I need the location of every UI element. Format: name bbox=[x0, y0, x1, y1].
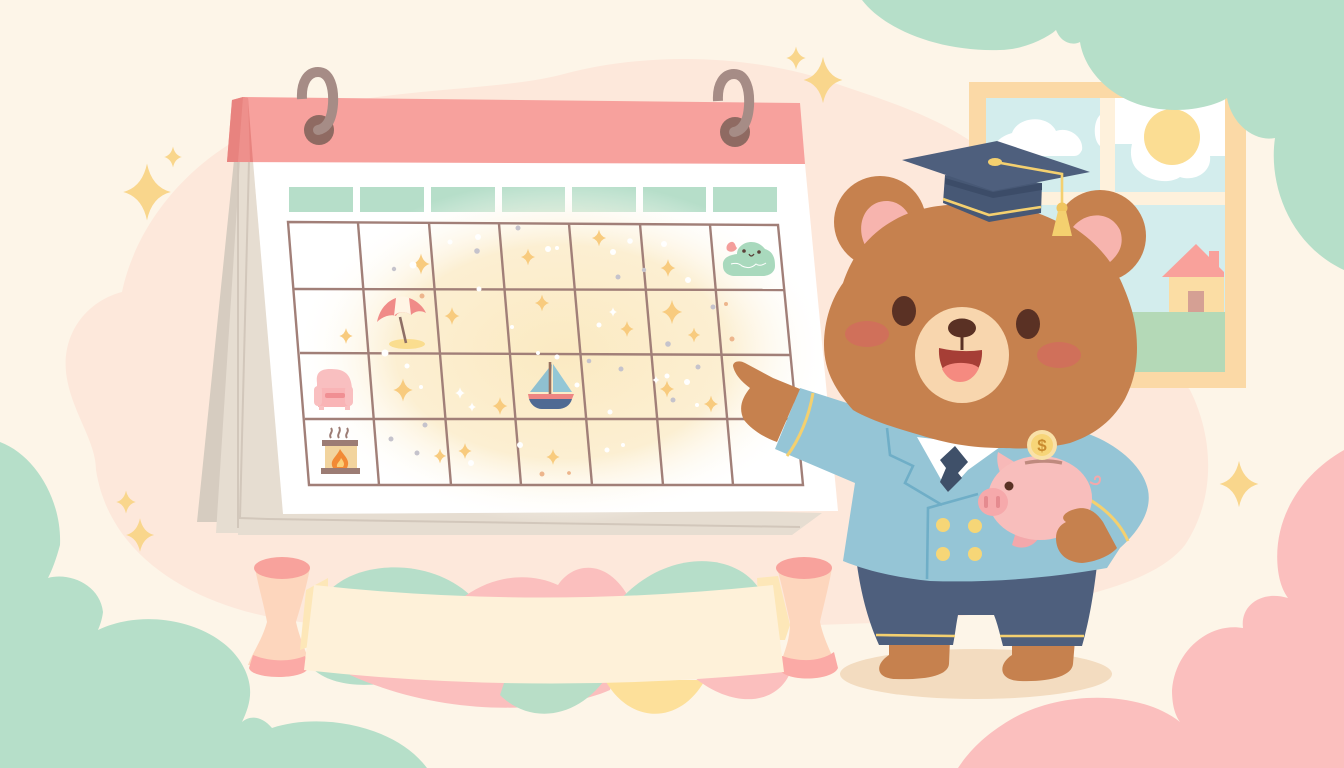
icon: beach umbrella bbox=[377, 296, 426, 349]
graduation cap bbox=[902, 141, 1090, 236]
icon: armchair bbox=[314, 369, 353, 410]
bear ground shadow bbox=[840, 649, 1112, 699]
bear holding paw bbox=[1056, 508, 1117, 563]
bear jacket bbox=[775, 388, 1149, 581]
orange dots on calendar bbox=[420, 294, 734, 476]
banner left scroll bbox=[248, 557, 328, 677]
coin: $ bbox=[1037, 436, 1047, 455]
window sun bbox=[1115, 98, 1225, 181]
blank banner ribbon bbox=[304, 585, 784, 684]
bear head bbox=[824, 204, 1137, 448]
jacket gold buttons bbox=[936, 518, 982, 561]
calendar top band bbox=[227, 97, 805, 164]
bear shorts bbox=[857, 565, 1097, 646]
icon: smiling green cloud bbox=[723, 242, 775, 276]
calendar back pages bbox=[197, 160, 822, 535]
sparkles around the scene bbox=[116, 46, 1258, 552]
bear feet bbox=[879, 640, 1075, 681]
background peach blob bbox=[66, 59, 1208, 630]
jacket lapels bbox=[887, 428, 978, 579]
golden glow on calendar bbox=[294, 180, 830, 524]
window cloud bbox=[992, 115, 1100, 156]
bear pointing paw bbox=[733, 361, 800, 442]
calendar grid bbox=[288, 222, 803, 485]
sparkles on calendar bbox=[339, 230, 718, 465]
banner backing scallops bbox=[314, 561, 792, 714]
calendar white page bbox=[253, 161, 838, 514]
grey dots on calendar bbox=[388, 226, 716, 456]
piggy bank with coin bbox=[978, 430, 1100, 548]
shirt collar and tie bbox=[917, 437, 1000, 492]
banner right scroll bbox=[757, 557, 838, 678]
binder ring right bbox=[718, 74, 750, 147]
calendar bbox=[197, 72, 838, 535]
bear ears bbox=[834, 176, 1146, 282]
cap tassel bbox=[988, 158, 1072, 236]
bear bbox=[733, 141, 1149, 699]
binder ring left bbox=[302, 72, 334, 145]
window house bbox=[1162, 244, 1224, 312]
top right green clouds bbox=[862, 0, 1344, 270]
white dots on calendar bbox=[382, 234, 699, 466]
bottom left green clouds bbox=[0, 442, 427, 768]
bear face bbox=[845, 296, 1081, 403]
weekday header blocks bbox=[289, 187, 777, 212]
icon: fireplace bbox=[321, 427, 360, 474]
window bbox=[969, 82, 1246, 388]
sleeve cuff stripes bbox=[787, 393, 1128, 541]
bottom right pink clouds bbox=[958, 450, 1344, 768]
icon: sailboat bbox=[528, 362, 574, 409]
